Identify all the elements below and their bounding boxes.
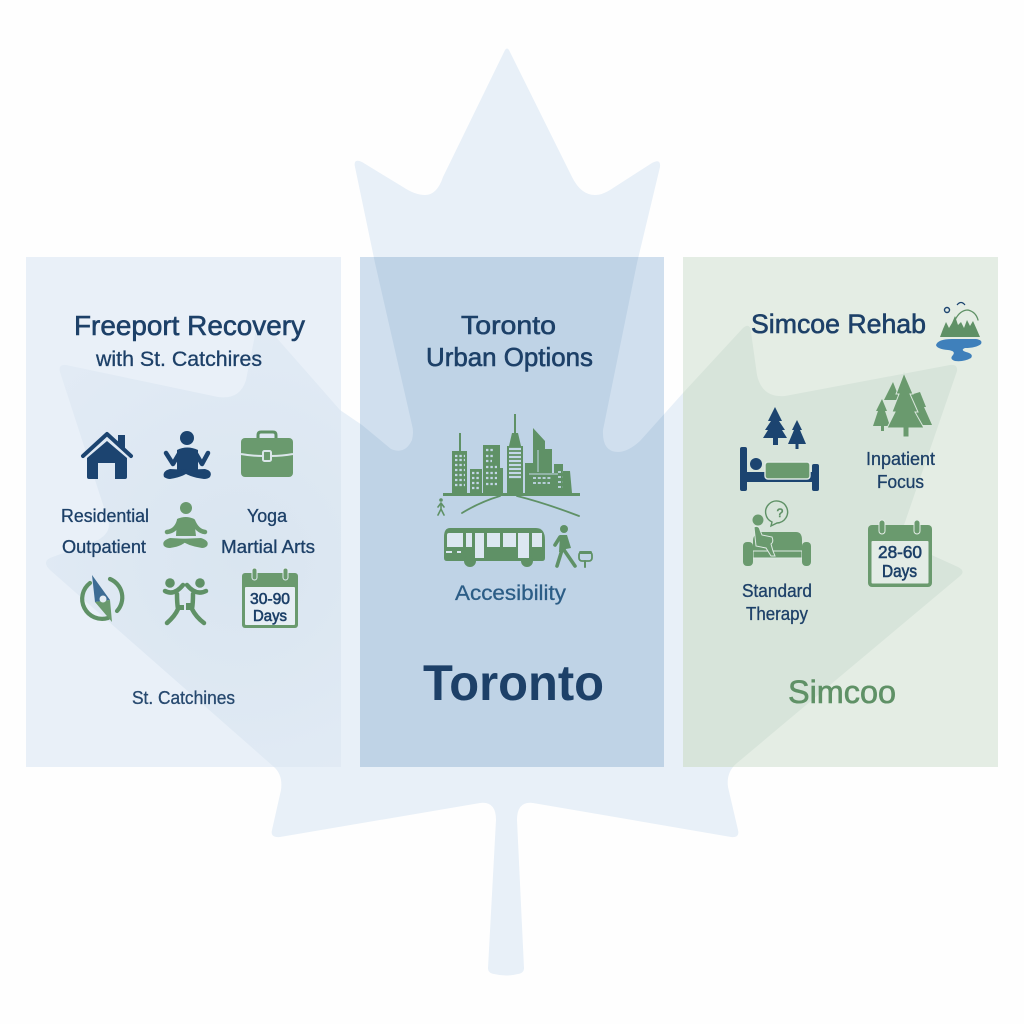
label: Accesibility: Accesibility [455, 582, 567, 605]
heading: Simcoe Rehab: Simcoe Rehab [751, 309, 926, 339]
icon: green meditating figure [163, 502, 208, 548]
panel: Simcoe Rehab [683, 257, 998, 767]
icon: walking person at bus stop [555, 525, 592, 567]
panel: Toronto Urban Options [360, 257, 664, 767]
icon: two martial arts figures [165, 578, 206, 623]
icon: bus [444, 528, 545, 567]
icon: pine trees [873, 373, 932, 437]
heading: Freeport Recovery: Freeport Recovery [74, 310, 305, 341]
label: Standard: Standard [742, 581, 812, 601]
label: Outpatient: Outpatient [62, 537, 146, 557]
icon: compass [82, 575, 122, 622]
label: Therapy: Therapy [746, 604, 808, 624]
label: Martial Arts: Martial Arts [221, 537, 315, 557]
icon: small pedestrian [438, 498, 444, 515]
label: Yoga: Yoga [247, 506, 288, 526]
icon: calendar 28-60 days [868, 520, 932, 587]
icon: city skyline [443, 414, 580, 516]
big label: Toronto: Toronto [423, 655, 604, 711]
heading: Toronto: Toronto [461, 310, 556, 340]
icon: calendar 30-90 days [242, 568, 298, 628]
icon: dark meditating figure [164, 431, 211, 479]
icon: calendar 30-90 days: 30-90 [250, 591, 290, 608]
icon: forest and lake [936, 302, 981, 361]
label: St. Catchines: St. Catchines [132, 687, 235, 708]
icon: calendar 30-90 days: Days [253, 608, 287, 625]
panel: Freeport Recovery [26, 257, 341, 767]
subheading: with St. Catchires [95, 348, 262, 371]
icon: calendar 28-60 days: Days [882, 561, 917, 581]
big label: Simcoo: Simcoo [788, 674, 896, 710]
icon: briefcase [241, 432, 293, 477]
icon: house [83, 434, 131, 479]
icon: calendar 28-60 days: 28-60 [878, 542, 922, 562]
label: Residential: Residential [61, 506, 149, 526]
heading: Urban Options: Urban Options [426, 342, 593, 372]
icon: bed with trees [740, 407, 819, 491]
label: Inpatient: Inpatient [866, 449, 935, 469]
label: Focus: Focus [877, 472, 924, 492]
icon: therapy sofa: ? [777, 506, 784, 520]
icon: therapy sofa [743, 501, 811, 566]
